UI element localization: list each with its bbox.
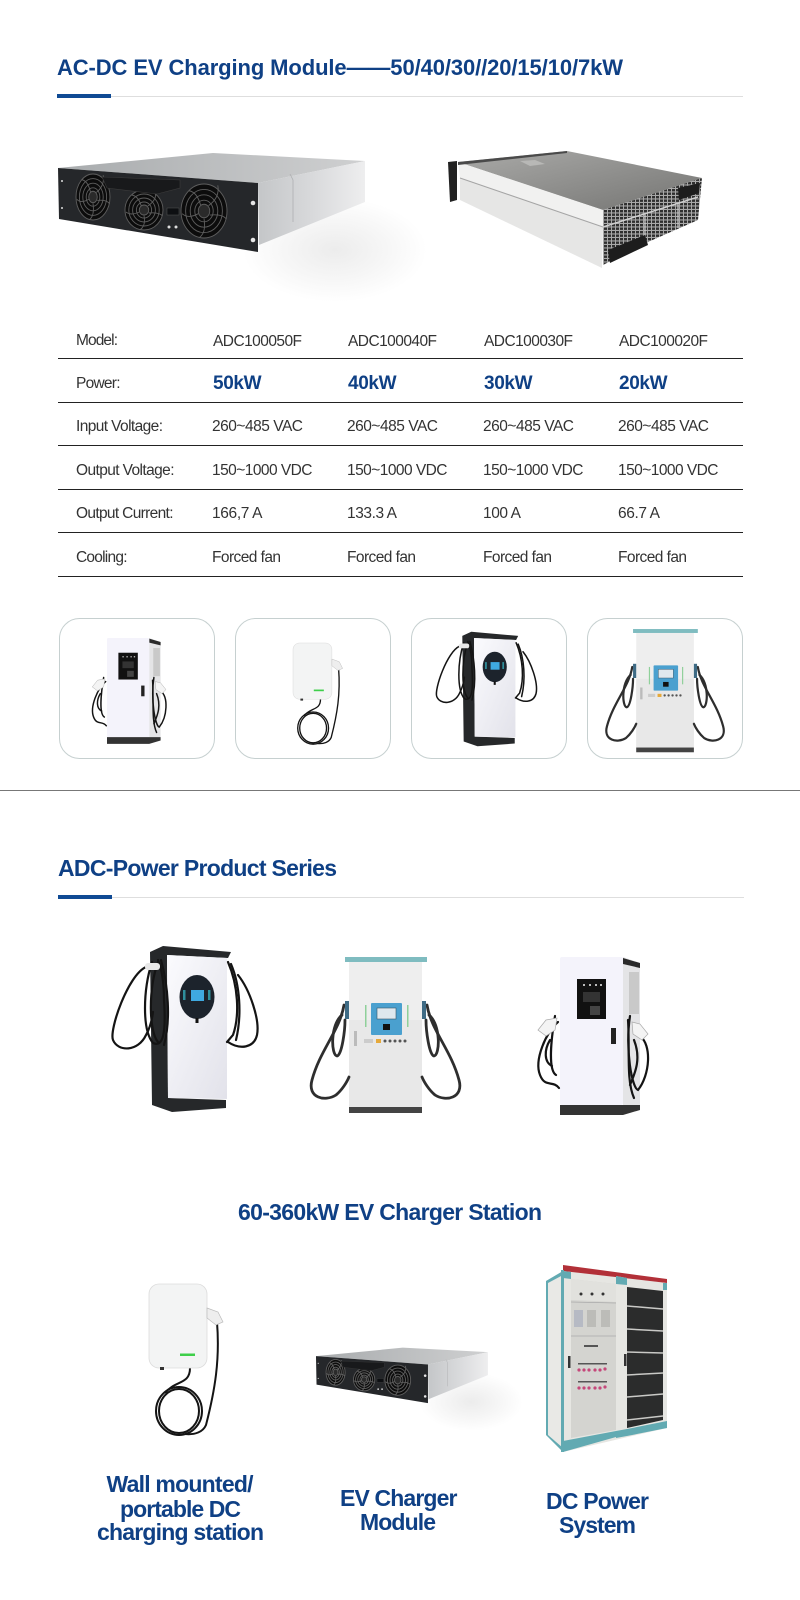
subtitle: 60-360kW: 60-360kW EV Charger Station — [238, 1199, 542, 1225]
label: EV charger module: Module — [360, 1509, 436, 1535]
row: output current: 100 A — [483, 505, 522, 522]
label: EV charger module — [340, 1485, 458, 1535]
row: model: Model: — [76, 332, 118, 349]
label: DC power system: DC Power — [546, 1488, 649, 1514]
card 3: charger with round display — [412, 618, 566, 758]
product photo: charging module front view — [58, 153, 365, 252]
row: power: 40kW — [348, 373, 397, 394]
shadow under module — [243, 198, 427, 302]
row: input voltage: Input Voltage: — [76, 418, 163, 435]
heading rule — [58, 895, 744, 899]
row: cooling: Forced fan — [618, 549, 687, 566]
card 4: charger with teal top — [588, 618, 742, 758]
row: input voltage: 260~485 VAC — [483, 418, 574, 435]
row: input voltage: 260~485 VAC — [347, 418, 438, 435]
label: wall mounted — [97, 1471, 264, 1545]
row: cooling: Forced fan — [483, 549, 552, 566]
row: cooling: Forced fan — [212, 549, 281, 566]
row: input voltage: 260~485 VAC — [618, 418, 709, 435]
title: AC-DC charging module: AC-DC EV Charging Module——50/40/30//20/15/10/7kW — [57, 55, 623, 80]
row: power: 50kW — [213, 373, 262, 394]
row: model: ADC100040F — [348, 333, 437, 350]
wall mounted charger — [149, 1284, 223, 1435]
row: output voltage: 150~1000 VDC — [347, 462, 448, 479]
row: input voltage — [76, 418, 709, 435]
row: model: ADC100050F — [213, 333, 302, 350]
label: wall mounted: Wall mounted/ — [106, 1471, 254, 1497]
label: wall mounted: portable DC — [120, 1496, 241, 1522]
row: model: ADC100030F — [484, 333, 573, 350]
label: DC power system: System — [559, 1512, 636, 1538]
spec table — [58, 332, 743, 577]
product photo: charging module rear view — [448, 151, 702, 268]
card 1: charger with black display — [60, 618, 214, 758]
title: product series: ADC-Power Product Series — [58, 855, 337, 881]
row: power: Power: — [76, 375, 120, 392]
row: model — [76, 332, 708, 350]
row: cooling: Cooling: — [76, 549, 128, 566]
charger: black display — [538, 957, 648, 1115]
DC power cabinet — [546, 1265, 667, 1452]
row: output voltage: 150~1000 VDC — [618, 462, 718, 479]
row: power — [76, 373, 668, 394]
heading rule — [57, 94, 743, 98]
charger: teal top — [311, 957, 460, 1113]
row: output voltage — [76, 462, 718, 479]
row: cooling — [76, 549, 687, 566]
row: output current: 166,7 A — [212, 505, 263, 522]
row: output voltage: 150~1000 VDC — [483, 462, 584, 479]
row: output voltage: 150~1000 VDC — [212, 462, 312, 479]
row: output current — [76, 505, 661, 522]
row: output current: 133.3 A — [347, 505, 398, 522]
card 2: wall charger — [236, 618, 390, 758]
label: DC power system — [546, 1488, 649, 1538]
charger: round display — [112, 946, 258, 1112]
label: wall mounted: charging station — [97, 1519, 264, 1545]
row: power: 30kW — [484, 373, 533, 394]
EV charger module — [316, 1348, 523, 1431]
row: power: 20kW — [619, 373, 668, 394]
row: output voltage: Output Voltage: — [76, 462, 174, 479]
row: cooling: Forced fan — [347, 549, 416, 566]
row: input voltage: 260~485 VAC — [212, 418, 303, 435]
row: output current: 66.7 A — [618, 505, 661, 522]
row: model: ADC100020F — [619, 333, 708, 350]
label: EV charger module: EV Charger — [340, 1485, 458, 1511]
row: output current: Output Current: — [76, 505, 174, 522]
